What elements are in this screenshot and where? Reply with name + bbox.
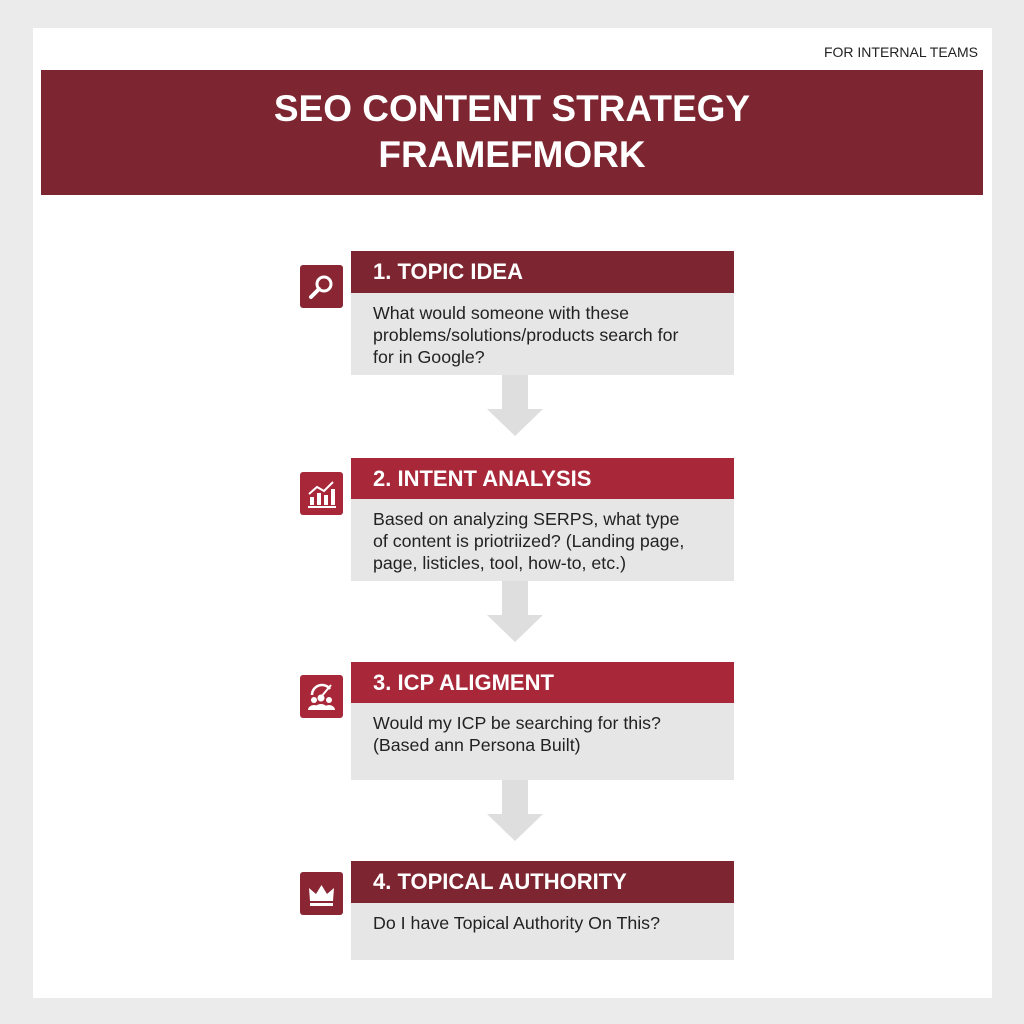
step 1 body <box>351 293 734 375</box>
title banner <box>41 70 983 195</box>
title banner: FRAMEFMORK <box>378 134 646 175</box>
step 1 icon: magnifier <box>300 265 343 308</box>
step 1 header <box>351 251 734 293</box>
step 2 header: 2. INTENT ANALYSIS <box>373 466 591 491</box>
step 1 body: What would someone with these <box>373 303 629 323</box>
step 2 body: of content is priotriized? (Landing page, <box>373 531 684 551</box>
arrow 3 <box>487 780 543 841</box>
step 2 icon: chart <box>300 472 343 515</box>
step 4 body <box>351 903 734 960</box>
step 3 body <box>351 703 734 780</box>
step 2 body <box>351 499 734 581</box>
arrow 1 <box>487 375 543 436</box>
step 1 body: for in Google? <box>373 347 485 367</box>
step 2 body: page, listicles, tool, how-to, etc.) <box>373 553 626 573</box>
step 3 body: (Based ann Persona Built) <box>373 735 581 755</box>
step 2 body: Based on analyzing SERPS, what type <box>373 509 679 529</box>
step 2 header <box>351 458 734 500</box>
tag: for internal teams: FOR INTERNAL TEAMS <box>824 44 978 60</box>
step 3 header <box>351 662 734 704</box>
step 4 header <box>351 861 734 903</box>
step 3 header: 3. ICP ALIGMENT <box>373 670 554 695</box>
step 1 body: problems/solutions/products search for <box>373 325 678 345</box>
step 4 icon: crown <box>300 872 343 915</box>
step 4 body: Do I have Topical Authority On This? <box>373 913 660 933</box>
step 1 header: 1. TOPIC IDEA <box>373 259 523 284</box>
step 3 body: Would my ICP be searching for this? <box>373 713 661 733</box>
title banner: SEO CONTENT STRATEGY <box>274 88 750 129</box>
step 3 icon: people target <box>300 675 343 718</box>
arrow 2 <box>487 581 543 642</box>
step 4 header: 4. TOPICAL AUTHORITY <box>373 869 627 894</box>
